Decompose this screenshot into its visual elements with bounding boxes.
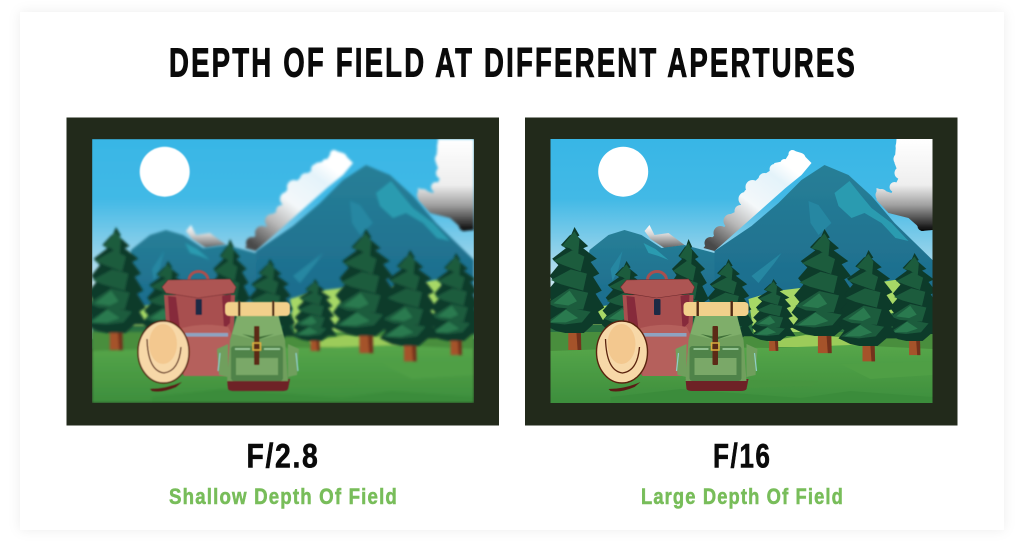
icon: sun [598,147,648,197]
grass [550,332,932,403]
aperture label f/2.8: F/2.8 [246,437,320,475]
mountains [580,165,932,314]
caption: shallow depth of field: Shallow Depth Of Field [169,484,398,509]
aperture label f/16: F/16 [713,437,772,475]
photo frame [525,118,958,426]
panel: f/2.8 shallow depth of field [66,118,499,509]
panel: f/16 large depth of field [525,118,958,509]
icon: sun [140,147,190,197]
clouds [644,139,932,251]
illustration: blurred background scene [85,139,483,403]
photo frame [66,118,499,426]
icon: straw hat [596,321,648,392]
clouds [186,139,474,251]
mountains [122,165,474,314]
sky [92,139,474,339]
icon: green backpack [217,301,299,391]
icon: straw hat [138,321,189,392]
icon: green backpack [676,301,758,391]
light green field [550,280,900,332]
pine trees [544,227,942,361]
caption: large depth of field: Large Depth Of Field [641,484,844,509]
pine trees [85,227,483,361]
sky [550,139,932,287]
icon: red backpack [162,272,236,376]
grass [92,332,474,403]
icon: red backpack [620,272,694,376]
illustration: sharp scene [544,139,942,403]
light green field [92,279,474,349]
